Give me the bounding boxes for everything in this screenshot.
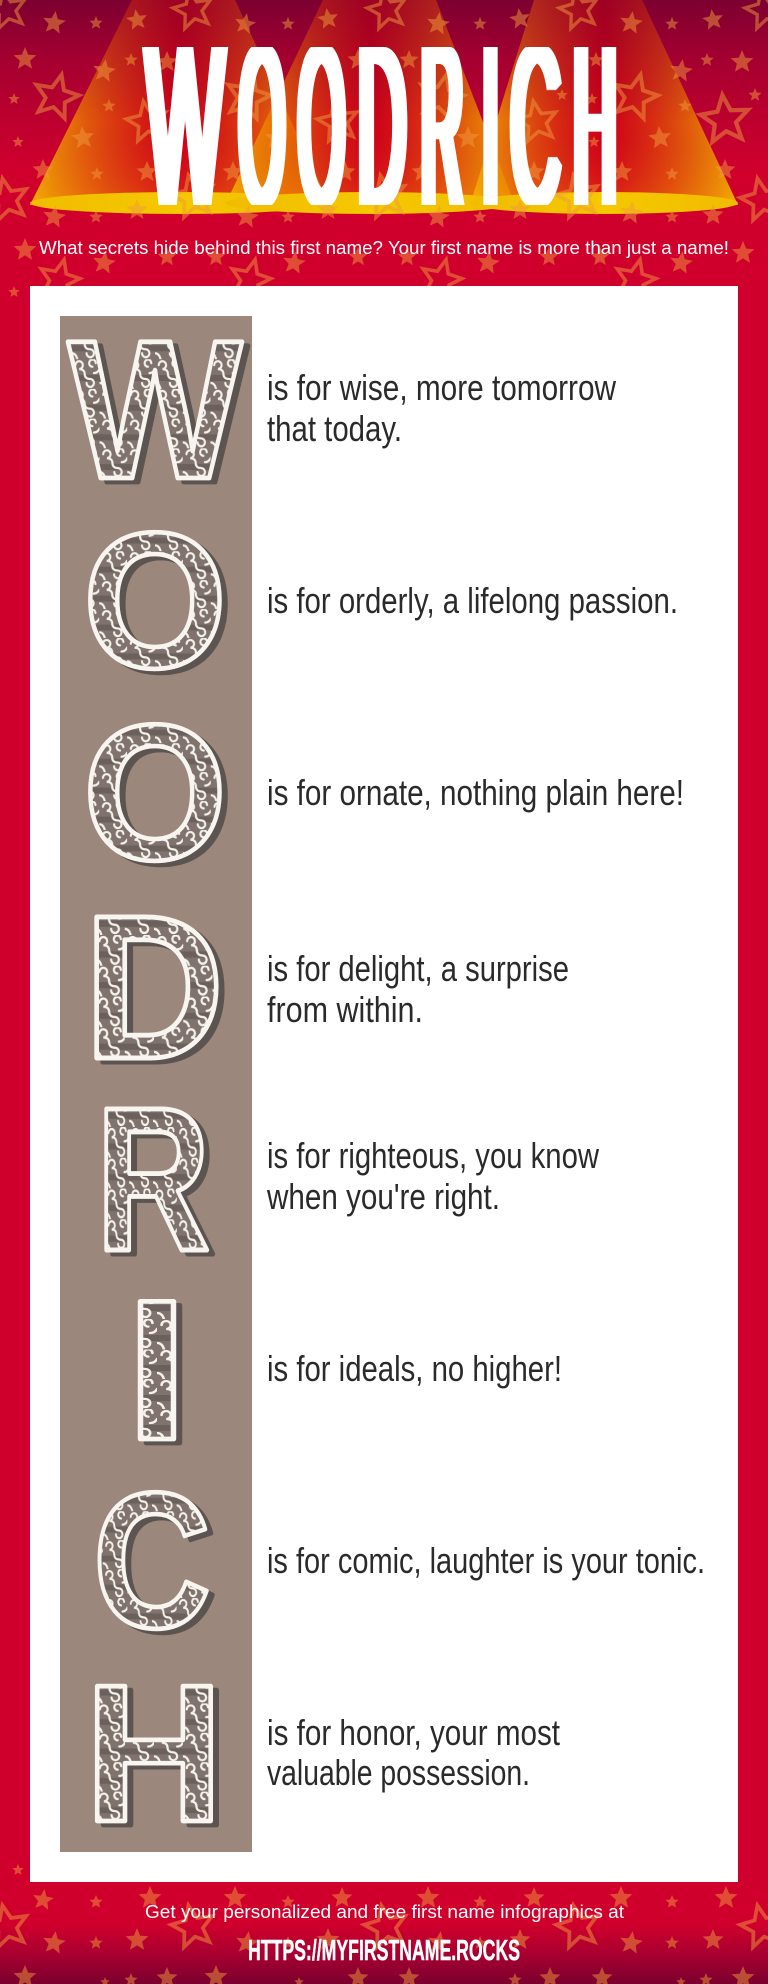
subtitle: What secrets hide behind this first name? Your first name is more than just a name! <box>39 238 729 258</box>
footer url: HTTPS://MYFIRSTNAME.ROCKS <box>248 1935 520 1967</box>
text: O line 2: is for ornate, nothing plain here! <box>267 772 684 813</box>
text: O line: is for orderly, a lifelong passion. <box>267 580 678 621</box>
stars: top <box>0 0 768 301</box>
text: W line <box>267 367 617 449</box>
letter W: W <box>74 303 248 524</box>
title: H <box>573 0 617 254</box>
title: C <box>511 0 560 254</box>
letter O: O <box>83 685 227 901</box>
letter O: O <box>83 493 227 709</box>
spotlights <box>30 0 738 214</box>
letter D: D <box>90 878 230 1106</box>
text: I line: is for ideals, no higher! <box>267 1348 562 1389</box>
letter I: I <box>125 1258 189 1482</box>
text: H line: valuable possession. <box>267 1752 530 1793</box>
letter R: R <box>102 1068 216 1298</box>
text: D line: from within. <box>267 989 423 1030</box>
letter W: W <box>68 299 242 520</box>
letter O: O <box>89 497 233 713</box>
letter I: I <box>131 1262 195 1486</box>
panel: brown letter column <box>60 316 252 1852</box>
text: R line: when you're right. <box>266 1176 500 1217</box>
letter C: C <box>99 1456 217 1672</box>
text: H line: is for honor, your most <box>267 1712 560 1753</box>
letter C: C <box>93 1452 211 1668</box>
title: O <box>239 0 285 254</box>
title: D <box>358 0 406 254</box>
text: W line: is for wise, more tomorrow <box>267 367 617 408</box>
footer text: Get your personalized and free first name infographics at <box>145 1901 624 1922</box>
text: R line <box>266 1135 600 1217</box>
title <box>142 47 616 205</box>
text: H line <box>267 1712 560 1793</box>
stars: bottom <box>0 1864 768 1984</box>
text: W line: that today. <box>267 408 402 449</box>
letter H: H <box>84 1645 224 1863</box>
letter D: D <box>84 874 224 1102</box>
letter O: O <box>89 689 233 905</box>
letter R: R <box>96 1064 210 1294</box>
text: D line: is for delight, a surprise <box>267 948 569 989</box>
title: R <box>421 0 463 254</box>
letter H: H <box>90 1649 230 1867</box>
title: O <box>298 0 345 254</box>
text: D line <box>267 948 569 1030</box>
title: W <box>146 0 224 254</box>
text: R line: is for righteous, you know <box>267 1135 600 1176</box>
title: I <box>483 0 498 254</box>
panel: white content card <box>30 286 738 1882</box>
